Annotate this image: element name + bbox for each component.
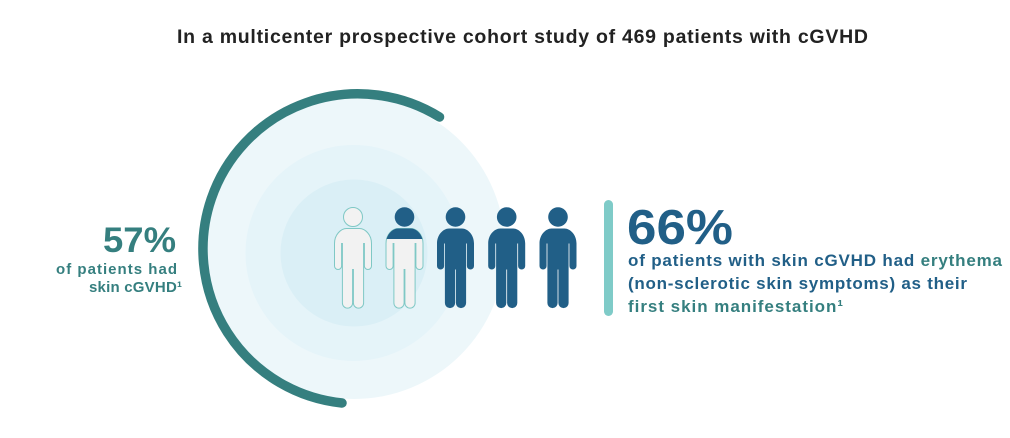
stat: 57% of patients had skin cGVHD: of patients had xyxy=(56,261,177,278)
person 5: filled xyxy=(540,207,576,308)
stat: 66% erythema: first skin manifestation¹ xyxy=(628,297,843,316)
person 4: filled xyxy=(488,207,525,308)
stat: 66% erythema: 66% xyxy=(627,201,733,255)
stat: 66% erythema xyxy=(627,201,1003,316)
progress arc: 57% xyxy=(203,94,440,403)
people icons: 5 figures xyxy=(334,207,576,308)
stat: 57% of patients had skin cGVHD: 57% xyxy=(103,221,176,260)
person 2: partly filled xyxy=(386,207,423,308)
stat: 57% of patients had skin cGVHD: skin cGVHD¹ xyxy=(89,279,182,296)
stat: 66% erythema: (non-sclerotic skin symptoms) as their xyxy=(628,274,967,293)
accent bar xyxy=(604,200,613,316)
concentric circles xyxy=(203,97,505,399)
person 1: unfilled xyxy=(334,208,372,308)
person 3: filled xyxy=(437,207,474,308)
stat: 57% of patients had skin cGVHD xyxy=(56,221,182,296)
title: In a multicenter prospective cohort study of 469 patients with cGVHD xyxy=(177,26,868,48)
stat: 66% erythema: of patients with skin cGVHD had erythema xyxy=(628,251,1003,270)
